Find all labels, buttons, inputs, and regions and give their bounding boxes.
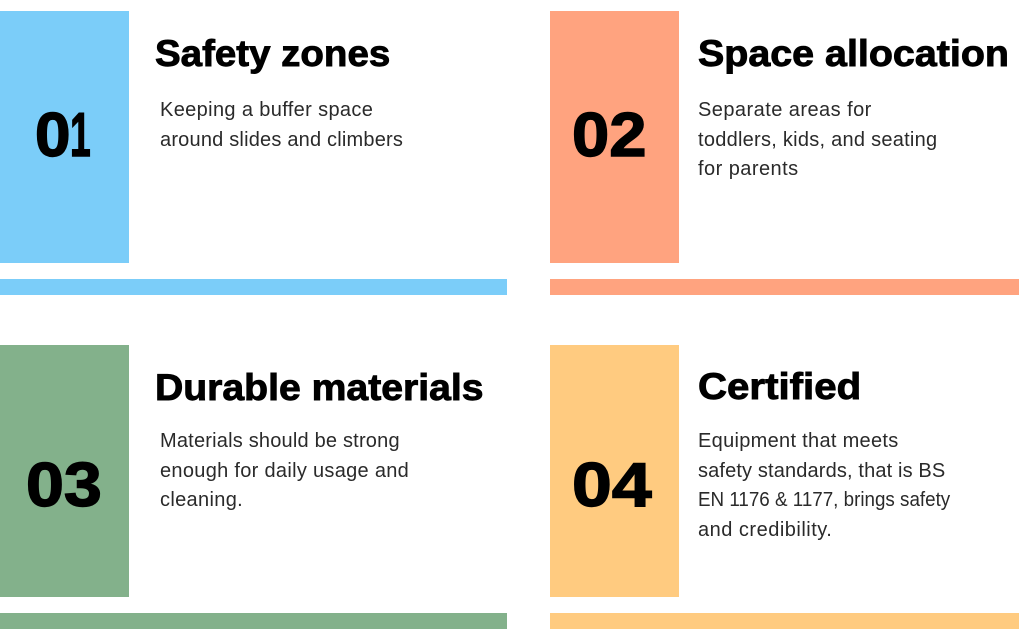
text: safety zones: Keeping a buffer space [160,99,373,121]
heading: space allocation: Space allocation [698,33,1009,74]
heading: durable materials: Durable materials [155,367,484,408]
number 04: 04 [572,451,652,520]
number block 03 [0,345,129,597]
text: space allocation: toddlers, kids, and seating [698,128,937,150]
number 01 [35,101,91,170]
panel: certified [550,345,1019,629]
text: durable materials: Materials should be strong [160,430,400,452]
number block 01 [0,11,129,263]
text: certified: EN 1176 & 1177, brings safety [698,489,950,511]
number 03: 03 [26,451,102,520]
heading: certified: Certified [698,366,861,407]
bar 2 [550,279,1019,295]
number 01: 1 [70,101,91,170]
text: certified: and credibility. [698,518,832,540]
text: certified [698,430,950,540]
panel: durable materials [0,345,507,629]
text: durable materials: enough for daily usage and [160,460,409,482]
bar 4 [550,613,1019,629]
bar 3 [0,613,507,629]
number 01: 0 [35,101,71,170]
text: durable materials: cleaning. [160,489,243,511]
panel: safety zones [0,11,507,295]
text: safety zones: around slides and climbers [160,128,403,150]
number 02: 02 [572,101,646,170]
text: certified: Equipment that meets [698,430,899,452]
heading: safety zones: Safety zones [155,33,390,74]
text: space allocation [698,99,937,180]
text: space allocation: for parents [698,158,799,180]
text: durable materials [160,430,409,511]
text: certified: safety standards, that is BS [698,460,945,482]
text: safety zones [160,99,403,150]
text: space allocation: Separate areas for [698,99,872,121]
panel: space allocation [550,11,1019,295]
number block 04 [550,345,679,597]
bar 1 [0,279,507,295]
number block 02 [550,11,679,263]
